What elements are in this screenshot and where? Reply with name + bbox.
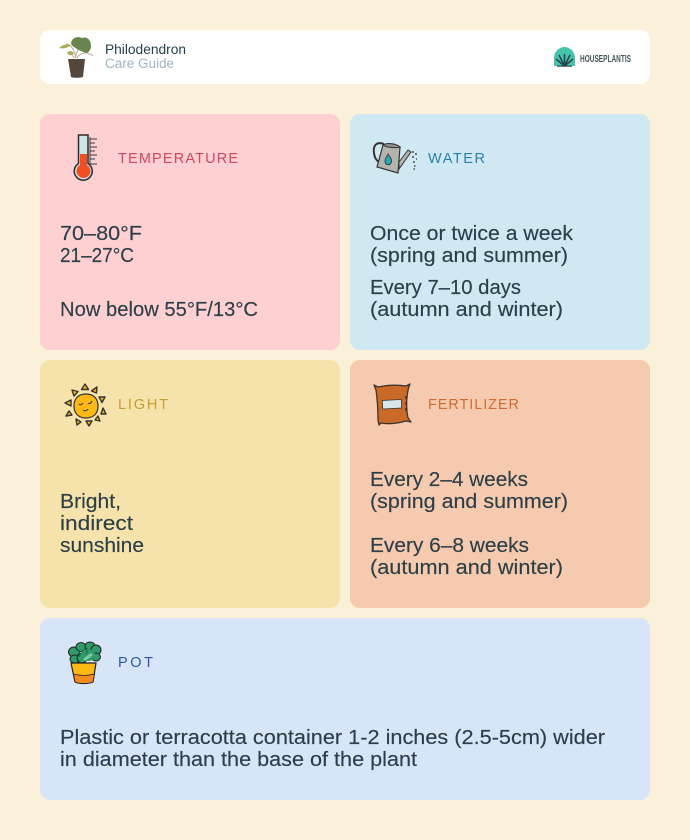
text: temperature range: 70–80°F [60, 222, 142, 245]
text: spring and summer feeding: Every 2–4 weeks [370, 468, 528, 491]
heading: temperature: TEMPERATURE [118, 151, 238, 167]
text: autumn and winter watering: (autumn and winter) [370, 298, 563, 321]
text: autumn and winter feeding: (autumn and winter) [370, 556, 563, 579]
heading: fertilizer: FERTILIZER [428, 397, 519, 413]
heading: pot: POT [118, 655, 153, 671]
text: spring and summer feeding [370, 468, 568, 513]
text: light requirement [60, 490, 144, 557]
header bar [40, 30, 650, 84]
text: autumn and winter feeding [370, 534, 563, 579]
icon: potted plant [68, 642, 101, 684]
text: temperature range [60, 222, 142, 267]
text: temperature range: 21–27°C [60, 244, 134, 267]
brand title: Philodendron [105, 42, 186, 57]
text: spring and summer watering: Once or twice a week [370, 222, 574, 245]
brand subtitle: Care Guide [105, 56, 174, 71]
heading: water: WATER [428, 151, 485, 167]
icon: fertilizer bag [374, 384, 411, 425]
icon: potted philodendron [59, 37, 93, 78]
icon: smiling sun [65, 384, 106, 426]
text: light requirement: Bright, [60, 490, 121, 513]
text: light requirement: indirect [60, 512, 133, 535]
panel: light [40, 360, 340, 608]
text: autumn and winter watering [370, 276, 563, 321]
icon: thermometer [74, 135, 97, 180]
text: autumn and winter watering: Every 7–10 days [370, 276, 521, 299]
logo: Houseplantis: HOUSEPLANTIS [580, 53, 631, 65]
text: pot requirement [60, 726, 605, 771]
panel: temperature [40, 114, 340, 350]
panel: water [350, 114, 650, 350]
icon: watering can [374, 143, 417, 173]
text: autumn and winter feeding: Every 6–8 weeks [370, 534, 529, 557]
panel: fertilizer [350, 360, 650, 608]
text: pot requirement: Plastic or terracotta container 1-2 inches (2.5-5cm) wider [60, 726, 605, 749]
text: spring and summer watering: (spring and summer) [370, 244, 568, 267]
text: spring and summer watering [370, 222, 574, 267]
text: temperature minimum: Now below 55°F/13°C [60, 298, 258, 321]
text: light requirement: sunshine [60, 534, 144, 557]
logo: Houseplantis [554, 47, 631, 67]
text: spring and summer feeding: (spring and summer) [370, 490, 568, 513]
panel: pot [40, 618, 650, 800]
text: pot requirement: in diameter than the base of the plant [60, 748, 417, 771]
heading: light: LIGHT [118, 397, 168, 413]
